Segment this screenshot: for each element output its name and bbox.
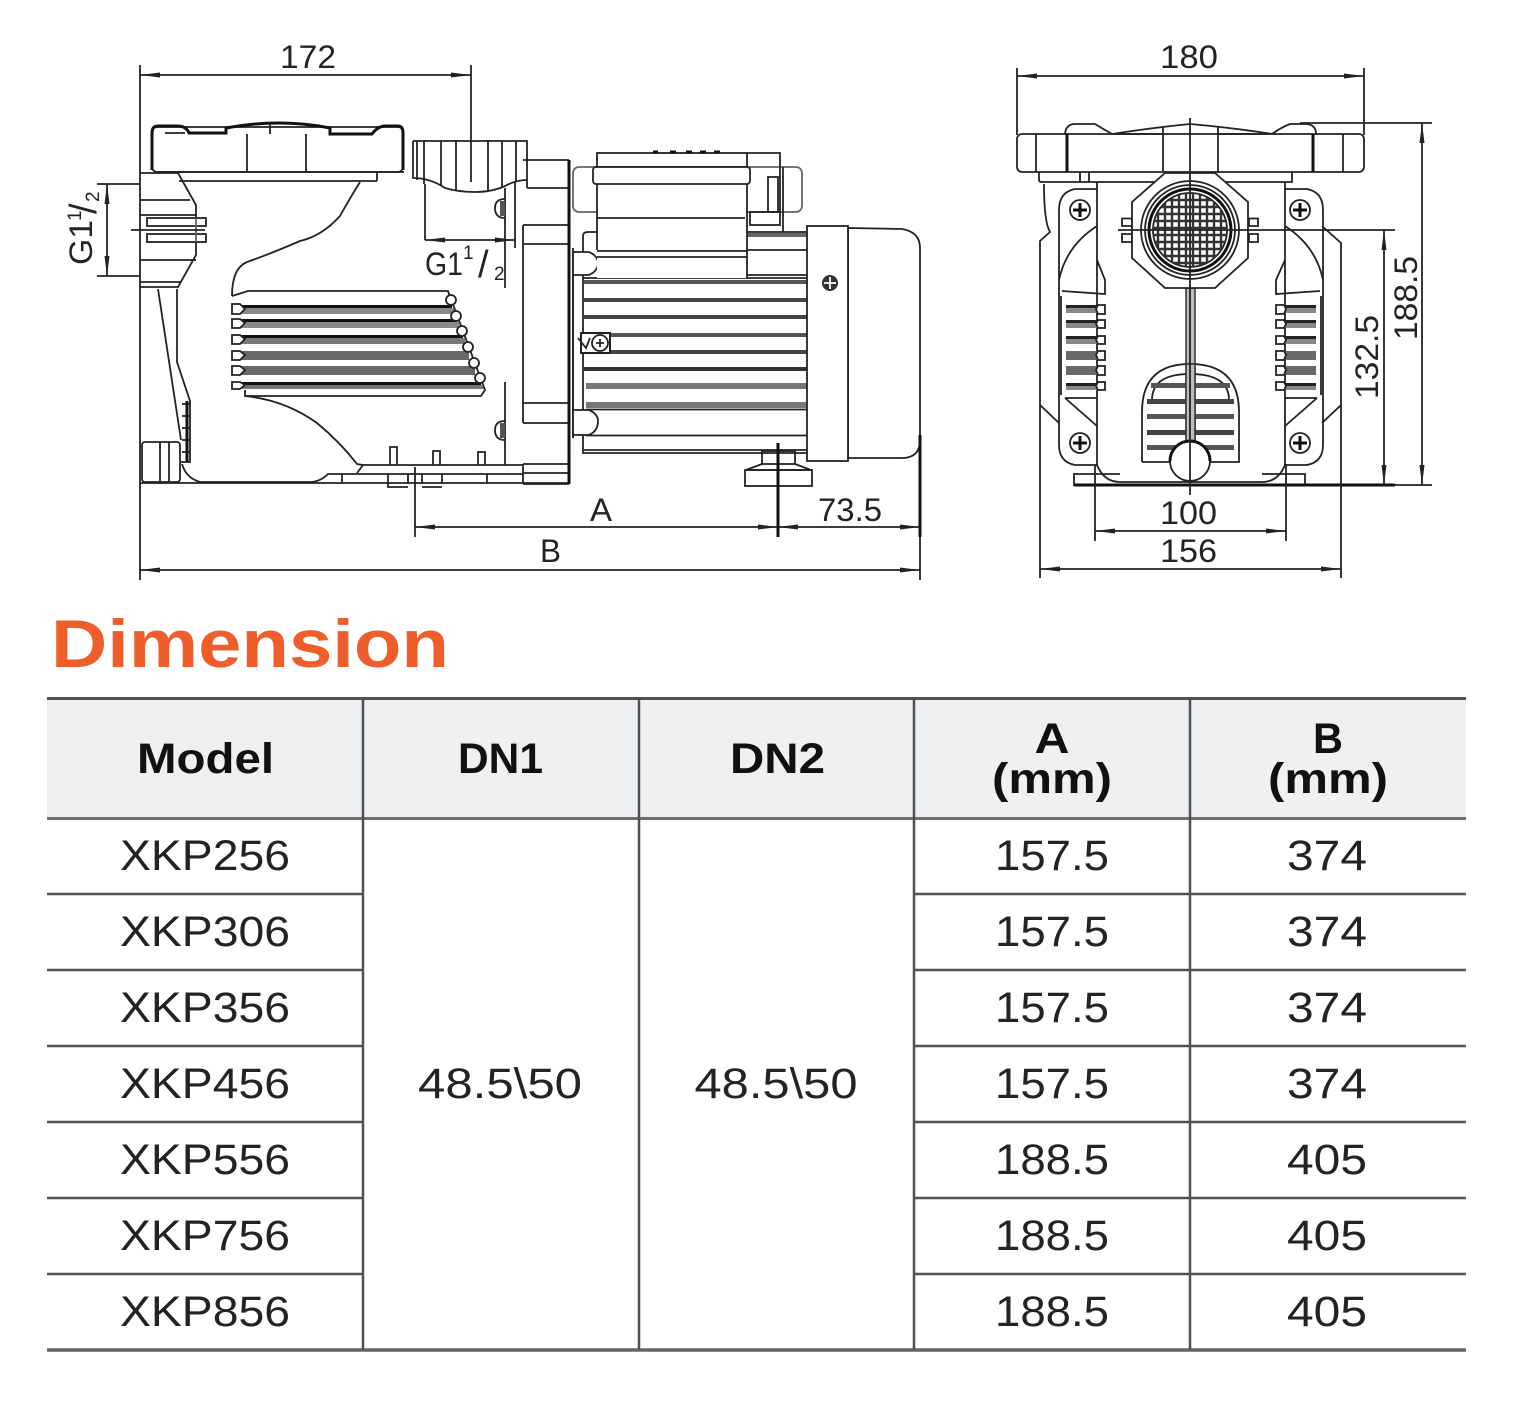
column B values	[1287, 832, 1367, 1336]
pump volute body outline	[140, 182, 570, 483]
dimension top port G1 1/2: G1	[425, 246, 463, 282]
dimension table	[47, 698, 1466, 1350]
column B values: 374	[1287, 984, 1367, 1032]
title: Dimension	[51, 606, 449, 682]
support foot	[745, 451, 812, 486]
side view cooling fins	[232, 291, 485, 396]
dimension top port G1 1/2: /	[478, 244, 489, 286]
column A values: 188.5	[995, 1288, 1109, 1336]
column A values: 157.5	[995, 984, 1109, 1032]
front lid	[1017, 124, 1364, 182]
dimension 100: 100	[1160, 495, 1217, 531]
right fin panel	[1276, 226, 1323, 426]
column B values: 405	[1287, 1212, 1367, 1260]
model column: XKP856	[120, 1288, 290, 1336]
header: B (mm): (mm)	[1268, 755, 1388, 803]
model column: XKP306	[120, 908, 290, 956]
table grid lines	[47, 698, 1466, 1350]
model column: XKP556	[120, 1136, 290, 1184]
column A values: 157.5	[995, 908, 1109, 956]
header: Model: Model	[137, 735, 274, 783]
front mounting screws	[1070, 200, 1310, 453]
dimension left port G1 1/2	[63, 184, 205, 276]
dimension 100	[1095, 465, 1286, 541]
dimension 156	[1040, 405, 1341, 578]
dimension top port G1 1/2: 1	[463, 243, 474, 264]
side view drawing of pump	[140, 123, 920, 487]
dimension A and 73.5: 73.5	[818, 492, 882, 528]
front base	[1074, 474, 1395, 486]
dimension top port G1 1/2: 2	[494, 264, 505, 285]
motor mounting flange	[523, 160, 573, 484]
dimension 172	[140, 39, 471, 580]
dimension 132.5	[1118, 230, 1395, 485]
model column: XKP256	[120, 832, 290, 880]
dimension 132.5: 132.5	[1349, 315, 1385, 399]
column B values: 405	[1287, 1288, 1367, 1336]
dimension 188.5 and center lines	[1190, 118, 1432, 495]
drain plug	[142, 442, 180, 482]
fan cover	[807, 226, 920, 461]
dimension top port G1 1/2	[425, 238, 515, 286]
column A values: 157.5	[995, 1060, 1109, 1108]
terminal box	[573, 152, 802, 278]
header: A (mm): (mm)	[992, 755, 1112, 803]
center rib	[1186, 288, 1195, 472]
column B values: 374	[1287, 1060, 1367, 1108]
model column	[120, 832, 290, 1336]
front view drawing of pump	[1017, 124, 1395, 486]
dimension B: B	[540, 533, 561, 569]
header: A (mm): A	[1034, 715, 1070, 763]
column A values: 157.5	[995, 832, 1109, 880]
dimension A and 73.5	[415, 435, 920, 537]
base feet and posts	[342, 447, 487, 487]
model column: XKP356	[120, 984, 290, 1032]
motor end bolts	[573, 252, 610, 435]
column A values: 188.5	[995, 1212, 1109, 1260]
header: DN2: DN2	[730, 735, 825, 783]
motor housing and fins	[573, 232, 807, 453]
model column: XKP456	[120, 1060, 290, 1108]
dimension left port G1 1/2: 2	[83, 191, 104, 202]
bolts on flange	[495, 199, 505, 465]
dimension 180	[1017, 39, 1364, 135]
column A values	[995, 832, 1109, 1336]
column B values: 405	[1287, 1136, 1367, 1184]
dimension 156: 156	[1160, 533, 1217, 569]
outlet union	[413, 141, 527, 288]
front outer body sides	[1040, 184, 1341, 423]
lower vent	[1142, 364, 1239, 481]
dimension left port G1 1/2: /	[63, 203, 105, 214]
front flange plate	[1059, 182, 1323, 482]
pump strainer lid side	[152, 123, 404, 181]
column B values: 374	[1287, 832, 1367, 880]
dimension A and 73.5: A	[590, 492, 613, 528]
header: DN1: DN1	[458, 735, 543, 783]
header: B (mm): B	[1313, 715, 1343, 763]
header: A (mm)	[992, 715, 1112, 803]
outlet fitting with mesh	[1122, 173, 1258, 288]
inlet flange	[140, 173, 206, 287]
DN1 merged value: 48.5\50	[418, 1060, 582, 1108]
dimension left port G1 1/2: 1	[65, 210, 86, 221]
dimension 180: 180	[1160, 39, 1218, 75]
DN2 merged value: 48.5\50	[694, 1060, 858, 1108]
dimension 172: 172	[280, 39, 336, 75]
dimension B	[140, 533, 920, 580]
left fin panel	[1059, 226, 1105, 426]
column A values: 188.5	[995, 1136, 1109, 1184]
dimension left port G1 1/2: G1	[63, 220, 99, 265]
header: B (mm)	[1268, 715, 1388, 803]
model column: XKP756	[120, 1212, 290, 1260]
column B values: 374	[1287, 908, 1367, 956]
table header background	[47, 698, 1466, 818]
dimension 188.5 and center lines: 188.5	[1388, 256, 1424, 340]
